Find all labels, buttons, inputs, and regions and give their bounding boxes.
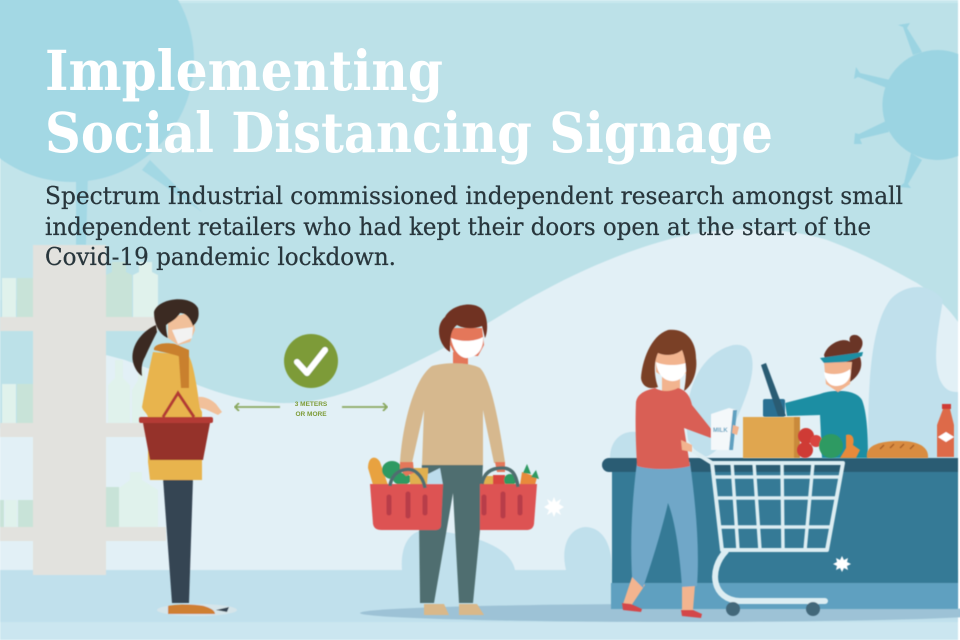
- shopping cart: [693, 451, 843, 616]
- decorative sparkle on counter: [833, 556, 851, 572]
- distance label: 3 METERS: [295, 401, 328, 408]
- person: man with two baskets: [368, 305, 539, 615]
- title: Social Distancing Signage: [45, 100, 773, 165]
- shelving unit: [0, 245, 166, 575]
- intro text block: independent retailers who had kept their doors open at the start of the: [45, 213, 871, 241]
- person: woman with basket: [132, 299, 237, 616]
- icon: virus: [854, 23, 958, 188]
- cardboard box: [743, 417, 800, 458]
- intro text block: Covid-19 pandemic lockdown.: [45, 243, 396, 271]
- distance label: OR MORE: [295, 411, 327, 418]
- checkout counter: [602, 458, 958, 609]
- intro text block: Spectrum Industrial commissioned independent research amongst small: [45, 182, 903, 210]
- person: woman with shopping cart: [622, 330, 739, 618]
- bottles on shelves: [0, 262, 158, 528]
- distance label: [295, 401, 328, 418]
- sauce bottle: [937, 404, 954, 457]
- icon: green checkmark: [284, 334, 338, 388]
- decorative sparkle: [544, 497, 564, 517]
- cash register: [761, 363, 786, 417]
- person: cashier with visor: [785, 335, 868, 458]
- title: Implementing: [45, 38, 443, 103]
- left basket food: [368, 458, 443, 485]
- person: woman with shopping cart: MILK: [713, 428, 728, 434]
- title: [45, 38, 773, 165]
- intro text block: [45, 182, 903, 271]
- groceries on counter: [797, 428, 928, 458]
- right basket food: [483, 464, 539, 486]
- arrow: left distance: [235, 403, 280, 411]
- arrow: right distance: [342, 403, 387, 411]
